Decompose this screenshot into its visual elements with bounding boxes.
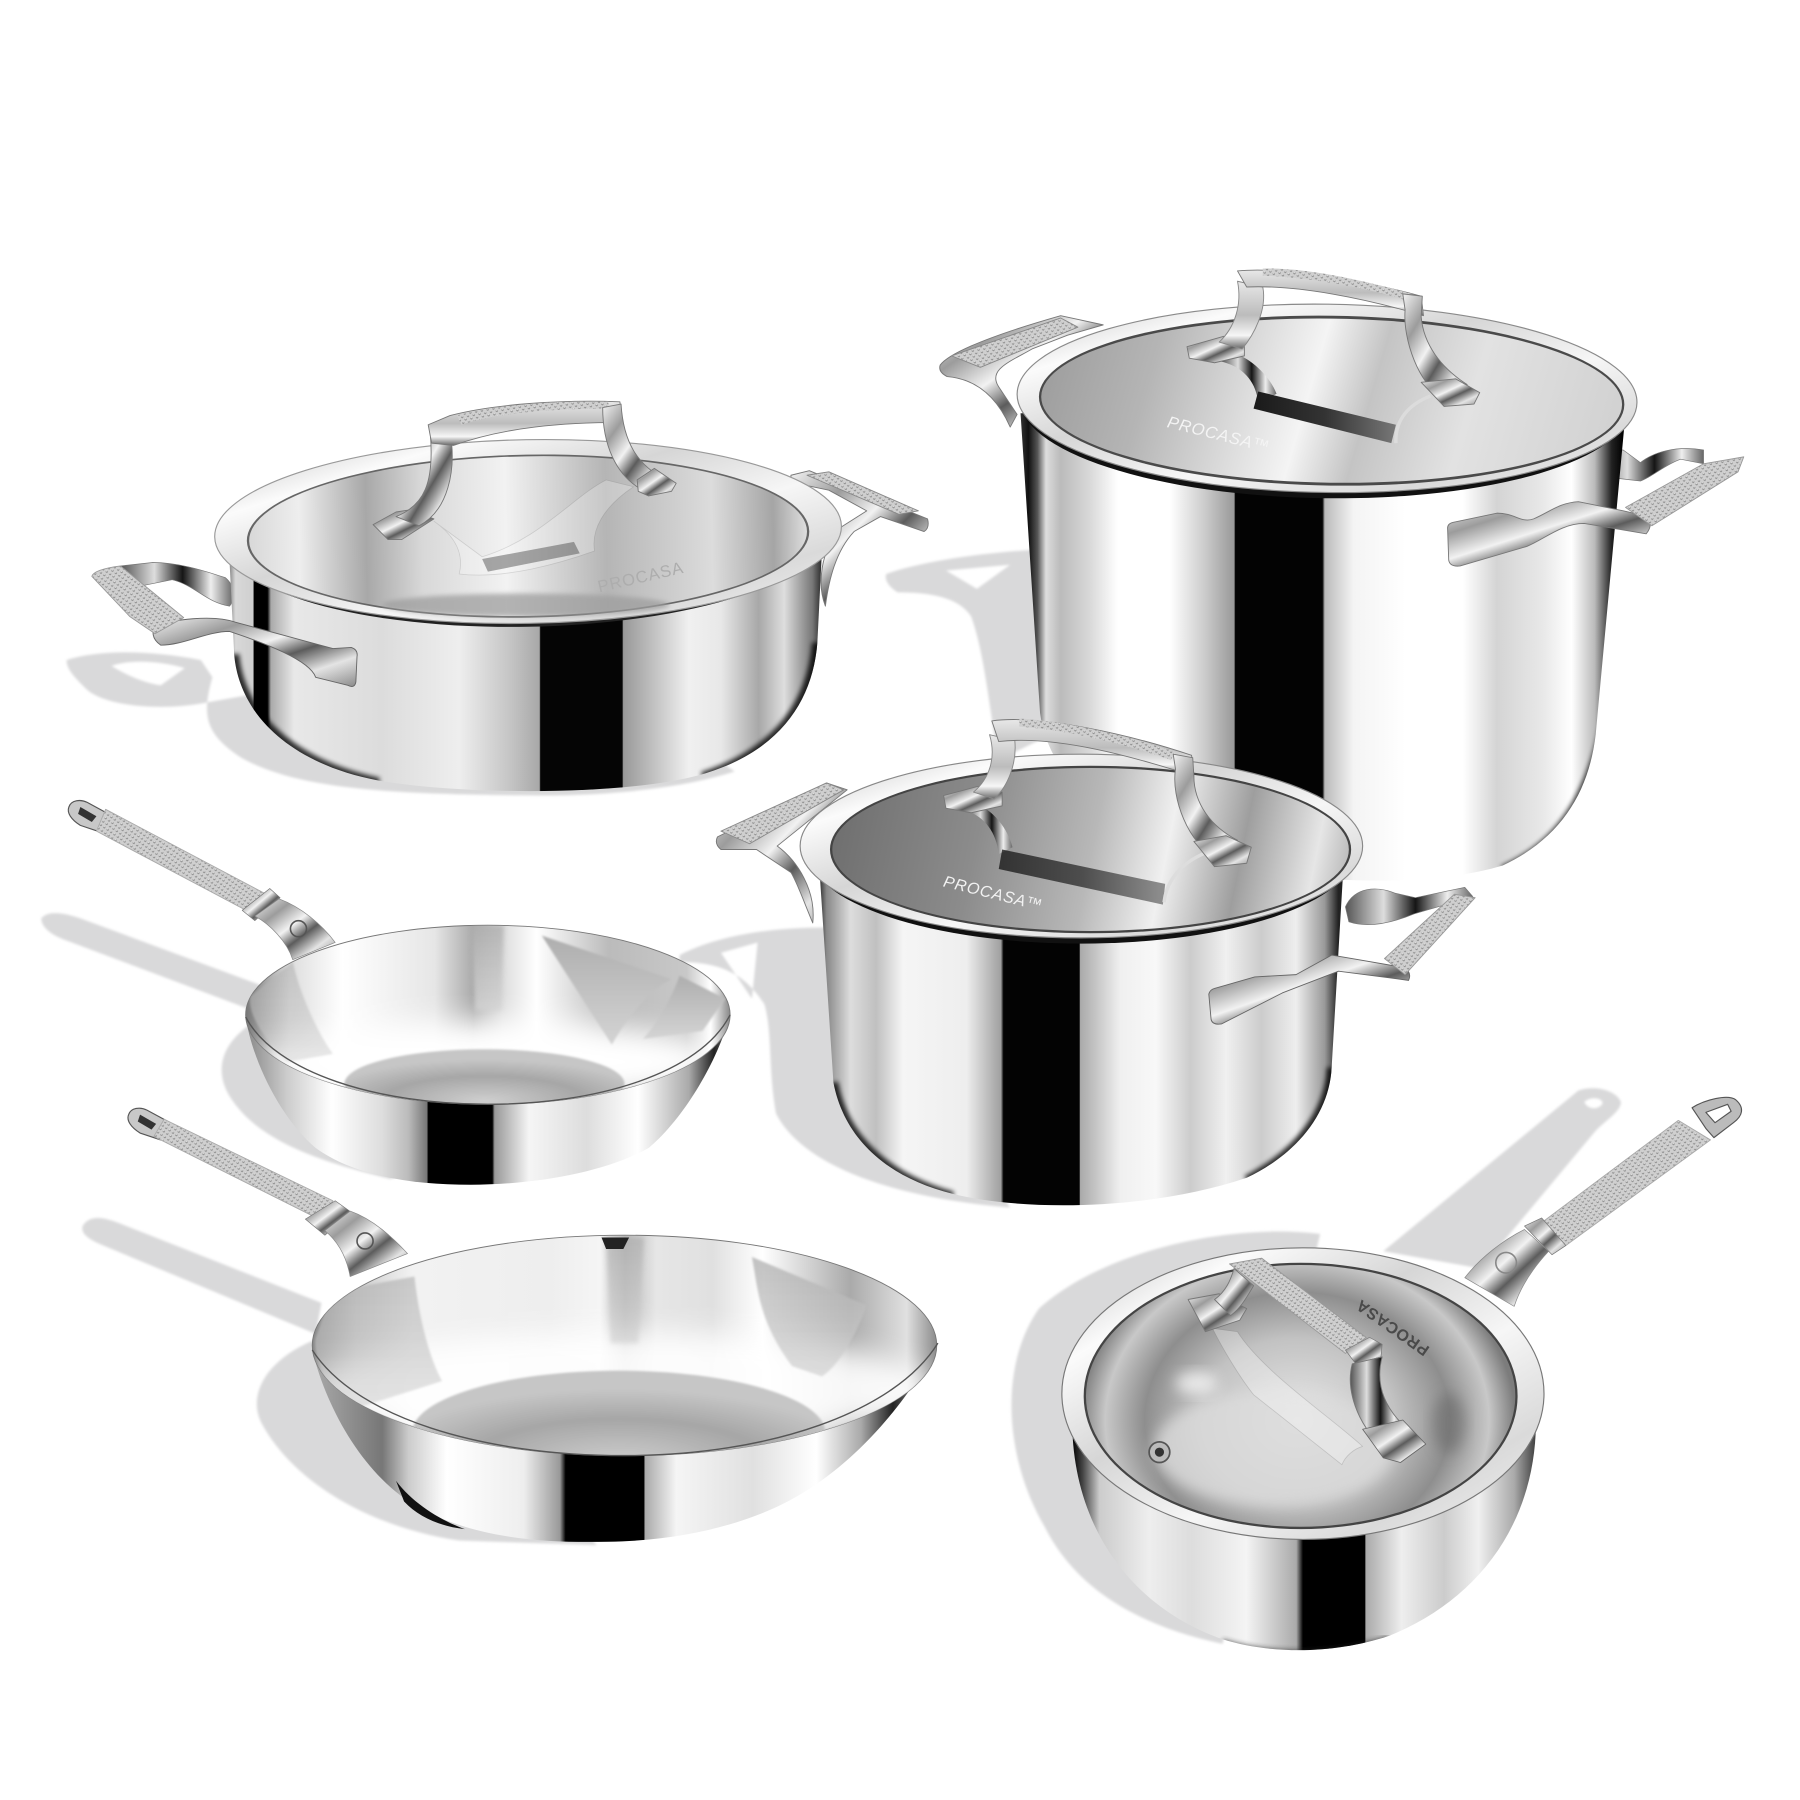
sauce pot right handle bbox=[1209, 894, 1475, 1024]
casserole lid rim bbox=[213, 434, 843, 629]
saucepan logo mark bbox=[1496, 1252, 1516, 1273]
saucepan long handle bbox=[1465, 1097, 1742, 1306]
saucepan interior highlights bbox=[1154, 1328, 1465, 1506]
saucepan lid handle bbox=[1188, 1258, 1426, 1462]
brand text: PROCASA: PROCASA bbox=[1353, 1296, 1433, 1359]
sauce pot right handle upper arm bbox=[1345, 887, 1473, 925]
large skillet outer body bbox=[312, 1343, 938, 1542]
casserole body bbox=[230, 551, 822, 791]
stock pot lid glass bbox=[1040, 315, 1623, 487]
cookware set illustration bbox=[40, 268, 1744, 1650]
stock pot dark rim lip bbox=[1018, 303, 1631, 502]
saucepan bottom shading bbox=[1223, 1638, 1389, 1652]
sauce pot lid handle reflection bbox=[967, 802, 1205, 905]
saucepan body bbox=[1072, 1423, 1536, 1650]
skillet logo mark bbox=[290, 921, 307, 937]
large skillet interior reflections bbox=[314, 1236, 932, 1455]
skillet interior reflections bbox=[250, 925, 726, 1118]
saucepan rim bbox=[1062, 1248, 1544, 1539]
sauce pot lid handle bbox=[944, 719, 1251, 867]
saucepan lid glass bbox=[1086, 1265, 1515, 1527]
casserole lid inner edge bbox=[245, 450, 811, 622]
skillet outer body bbox=[246, 1015, 730, 1185]
brand text: PROCASA: PROCASA™ bbox=[942, 873, 1045, 915]
stock pot lid inner edge bbox=[1038, 312, 1626, 490]
casserole lid glass bbox=[248, 451, 808, 621]
sauce pot left handle bbox=[716, 783, 847, 923]
brand text: PROCASA: PROCASA bbox=[596, 558, 686, 596]
casserole left handle bbox=[92, 566, 357, 686]
pot: stock pot bbox=[940, 269, 1744, 881]
stock pot bottom shading bbox=[1498, 726, 1596, 866]
stock pot body bbox=[1021, 413, 1626, 881]
floor shadows bbox=[41, 550, 1621, 1644]
stock pot right handle bbox=[1448, 457, 1744, 566]
sauce pot lid glass bbox=[832, 768, 1349, 931]
casserole dark rim lip bbox=[223, 438, 828, 632]
pot: low casserole bbox=[92, 401, 928, 791]
pot: medium sauce pot bbox=[716, 719, 1475, 1205]
pan: small skillet bbox=[68, 801, 730, 1185]
pan: lidded saucepan bbox=[1062, 1097, 1742, 1652]
casserole lid handle reflection bbox=[434, 480, 634, 575]
skillet handle bbox=[68, 801, 335, 960]
lid steam vent bbox=[1149, 1442, 1170, 1462]
casserole bottom shading bbox=[234, 643, 817, 783]
sauce pot lid inner edge bbox=[830, 766, 1351, 933]
sauce pot bottom shading bbox=[833, 1068, 1332, 1196]
skillet interior wall bbox=[246, 925, 730, 1104]
stock pot left handle bbox=[940, 316, 1103, 427]
stock pot lid handle reflection bbox=[1221, 351, 1430, 443]
stock pot lid handle bbox=[1187, 269, 1480, 406]
casserole right handle bbox=[791, 471, 928, 606]
large skillet logo mark bbox=[357, 1233, 373, 1249]
pan: large skillet bbox=[128, 1108, 938, 1542]
large skillet interior wall bbox=[312, 1235, 937, 1456]
stock pot right handle upper arm bbox=[1595, 449, 1704, 481]
sauce pot body bbox=[820, 872, 1343, 1205]
sauce pot lid rim bbox=[800, 754, 1363, 938]
casserole left handle upper arm bbox=[121, 562, 233, 606]
skillet front rim line bbox=[246, 1015, 730, 1104]
casserole lid handle bbox=[373, 401, 676, 540]
brand text: PROCASA: PROCASA™ bbox=[1165, 412, 1272, 456]
saucepan lid inner edge bbox=[1084, 1263, 1518, 1529]
large skillet front rim line bbox=[312, 1343, 938, 1456]
large skillet bottom-left dark reflection bbox=[396, 1481, 465, 1529]
large skillet handle bbox=[128, 1108, 408, 1277]
sauce pot dark rim lip bbox=[808, 760, 1355, 944]
casserole pan floor seen through lid bbox=[382, 593, 669, 616]
stock pot lid rim bbox=[1016, 300, 1638, 497]
